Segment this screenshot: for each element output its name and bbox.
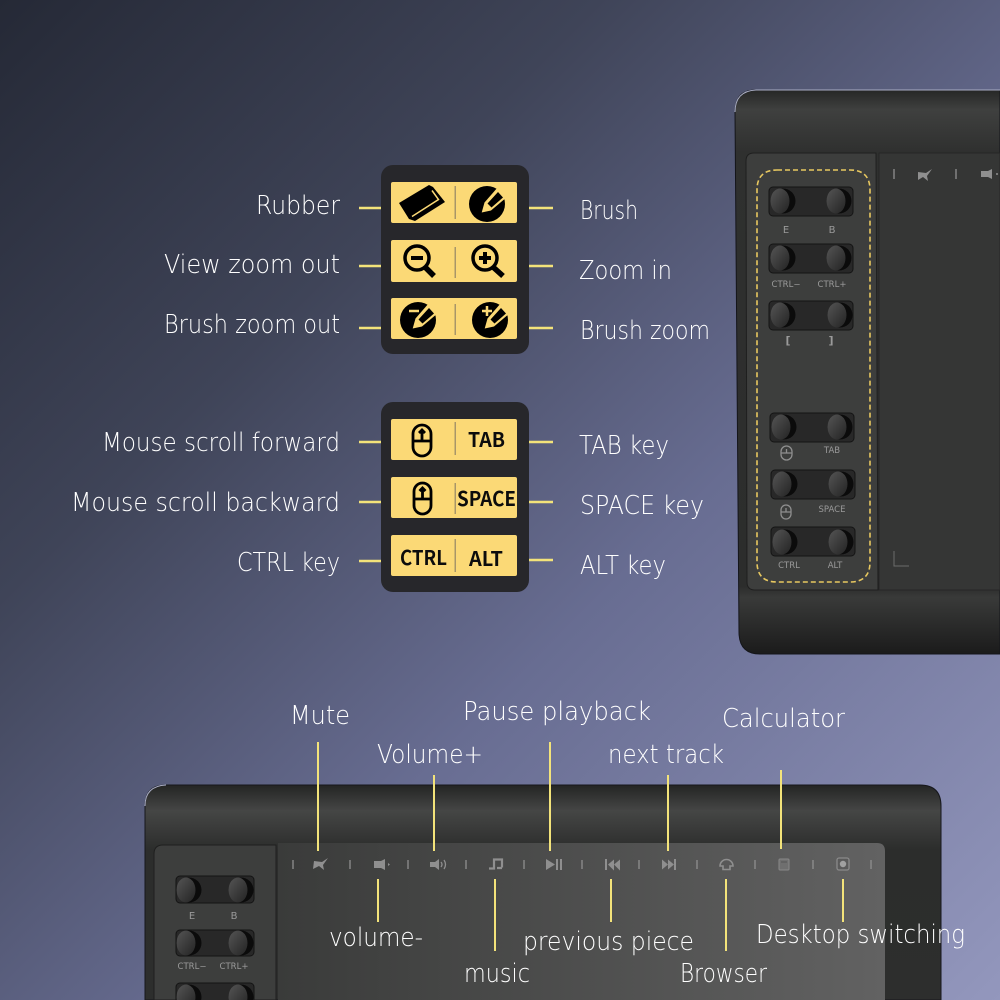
key row: CTRL- and CTRL+: CTRL−	[772, 280, 800, 290]
key: CTRL and ALT	[391, 535, 517, 576]
active drawing area	[278, 843, 885, 1000]
key: mouse scroll backward and SPACE	[391, 477, 517, 518]
icon: brush	[469, 186, 507, 222]
label: CTRL key: CTRL key	[237, 548, 340, 578]
icon: mute	[313, 858, 328, 870]
label: Zoom in: Zoom in	[579, 256, 672, 286]
label: next track: next track	[608, 740, 724, 770]
panel: function key group two	[381, 402, 529, 592]
label: Brush zoom out: Brush zoom out	[164, 310, 340, 340]
active drawing area	[879, 153, 1000, 590]
label: SPACE key: SPACE key	[580, 491, 704, 521]
icon: brush zoom out	[400, 302, 438, 338]
side tablet media icons	[894, 169, 998, 181]
icon: play pause	[546, 859, 562, 870]
dashed highlight around keys	[757, 170, 870, 582]
label: Browser: Browser	[680, 959, 767, 989]
key row: E and B: B	[829, 225, 836, 236]
label: Pause playback: Pause playback	[463, 697, 651, 727]
key: view zoom out and zoom in	[391, 240, 517, 282]
label: Rubber: Rubber	[256, 191, 340, 221]
icon: desktop switch	[837, 858, 849, 870]
panel: side tablet with express keys	[735, 90, 1000, 654]
key row: E and B	[769, 187, 853, 236]
key row: CTRL- and CTRL+	[769, 244, 853, 290]
bottom key row: E and B: B	[231, 911, 238, 922]
icon: volume up	[430, 859, 446, 870]
key row: CTRL and ALT: CTRL	[778, 561, 800, 571]
key row: CTRL and ALT: ALT	[828, 561, 843, 571]
icon: brush zoom in	[472, 302, 510, 338]
key row: brackets: [	[785, 334, 791, 347]
label: Mouse scroll backward: Mouse scroll backward	[71, 488, 340, 518]
bottom key row: CTRL- and CTRL+: CTRL+	[220, 962, 248, 972]
icon: next track	[662, 859, 676, 870]
key row: CTRL- and CTRL+: CTRL+	[818, 280, 846, 290]
key row: mouse backward and SPACE	[771, 470, 855, 519]
media icon separators	[293, 860, 871, 869]
label: View zoom out: View zoom out	[164, 250, 340, 280]
label: ALT key: ALT key	[580, 551, 666, 581]
key strip	[154, 845, 276, 1000]
key: rubber and brush	[391, 182, 517, 223]
label: Volume+: Volume+	[377, 740, 483, 770]
label: music: music	[464, 959, 530, 989]
icon: rubber	[399, 185, 445, 221]
label: Calculator: Calculator	[722, 704, 845, 734]
media key callouts	[290, 697, 965, 989]
icon: previous track	[605, 859, 620, 870]
bottom key row: CTRL- and CTRL+: CTRL−	[178, 962, 206, 972]
media leader lines	[318, 742, 843, 951]
key row: brackets: ]	[828, 334, 834, 347]
key: mouse scroll forward and TAB	[391, 419, 517, 460]
left leader lines	[359, 208, 381, 561]
tablet highlight edge	[735, 90, 1000, 112]
icon: volume down	[374, 859, 390, 870]
label: Mute: Mute	[290, 701, 350, 731]
label: Mouse scroll forward: Mouse scroll forward	[102, 428, 340, 458]
key row: mouse backward and SPACE: SPACE	[819, 505, 845, 515]
label: Desktop switching: Desktop switching	[756, 920, 965, 950]
panel: bottom tablet with media keys	[145, 785, 941, 1000]
key row: E and B: E	[783, 225, 789, 236]
icon: zoom in	[473, 246, 503, 276]
right callouts	[529, 196, 710, 581]
key row: brackets	[769, 301, 853, 347]
bottom key row: CTRL- and CTRL+	[176, 930, 254, 972]
key row: mouse forward and TAB	[770, 413, 854, 460]
icon: music	[489, 860, 502, 868]
tablet highlight edge	[145, 785, 166, 806]
right leader lines	[529, 208, 553, 560]
left callouts	[71, 191, 381, 578]
icon: zoom out	[405, 246, 434, 276]
key row: mouse forward and TAB: TAB	[823, 446, 840, 456]
icon: calculator	[779, 859, 789, 870]
icon: mouse forward	[413, 425, 431, 456]
key: CTRL and ALT: CTRL	[400, 542, 447, 571]
icon: browser home	[720, 860, 733, 870]
key row: CTRL and ALT	[771, 527, 855, 571]
panel: function key group one	[381, 165, 529, 354]
key: CTRL and ALT: ALT	[468, 543, 503, 572]
bottom key row: E and B	[176, 876, 254, 922]
key: mouse scroll forward and TAB: TAB	[468, 424, 505, 453]
express key strip	[746, 153, 878, 590]
key: brush zoom out and brush zoom	[391, 298, 517, 339]
label: Brush zoom: Brush zoom	[580, 316, 710, 346]
corner mark	[894, 551, 909, 566]
bottom key row: E and B: E	[189, 911, 195, 922]
icon: mouse backward	[414, 483, 431, 514]
label: Brush: Brush	[580, 196, 638, 226]
bottom key row: brackets	[176, 983, 254, 1000]
label: previous piece: previous piece	[523, 927, 694, 957]
key: mouse scroll backward and SPACE: SPACE	[457, 483, 516, 512]
label: TAB key: TAB key	[579, 431, 669, 461]
label: volume-: volume-	[329, 923, 423, 953]
